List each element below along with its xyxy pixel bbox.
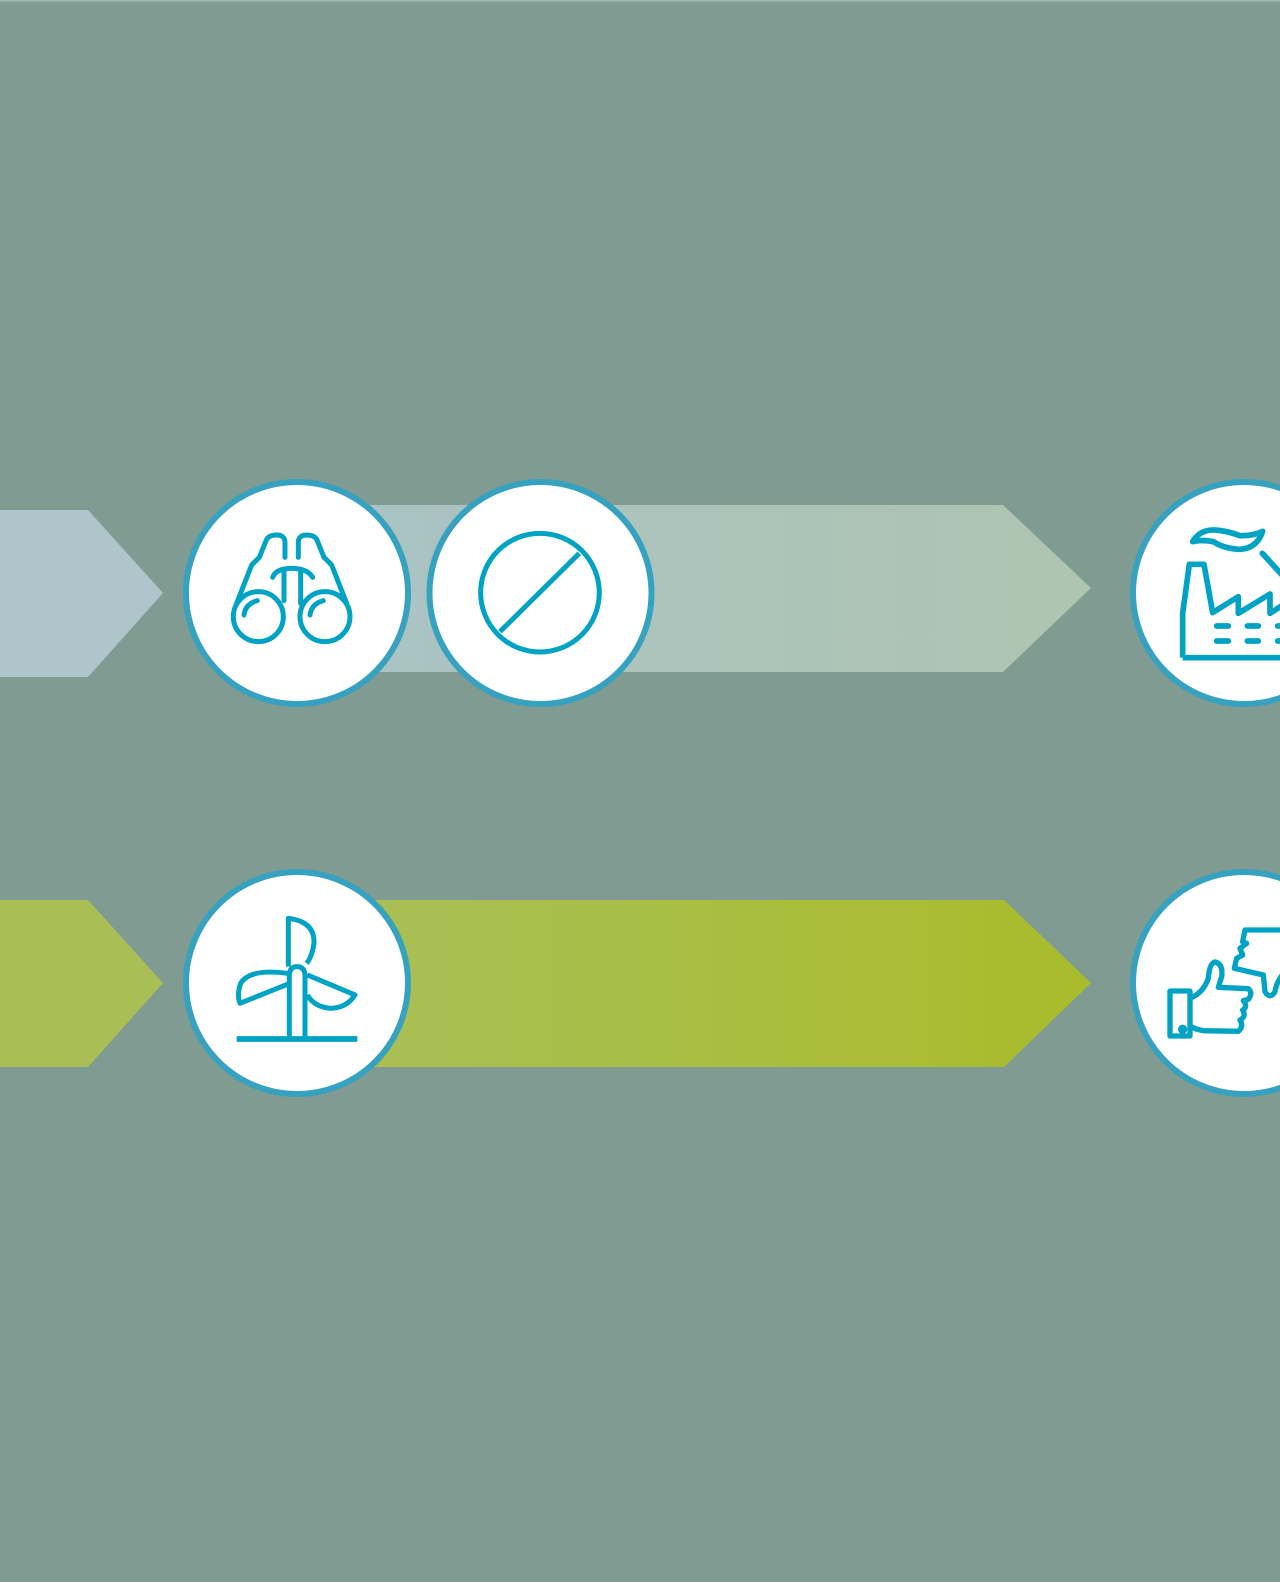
arrow: top row left, pale blue: [0, 510, 163, 677]
icon: wind turbine in circle: [186, 872, 408, 1094]
arrow: bottom row middle, green: [370, 900, 1091, 1067]
icon: binoculars in circle: [186, 482, 408, 704]
arrow: top row middle, pale grey-green: [360, 505, 1091, 672]
icon: factory with smoke in circle: [1133, 482, 1280, 704]
icon: thumbs up and down in circle: [1133, 872, 1280, 1094]
arrow: bottom row left, light green: [0, 900, 163, 1067]
icon: prohibition sign in circle: [430, 482, 652, 704]
